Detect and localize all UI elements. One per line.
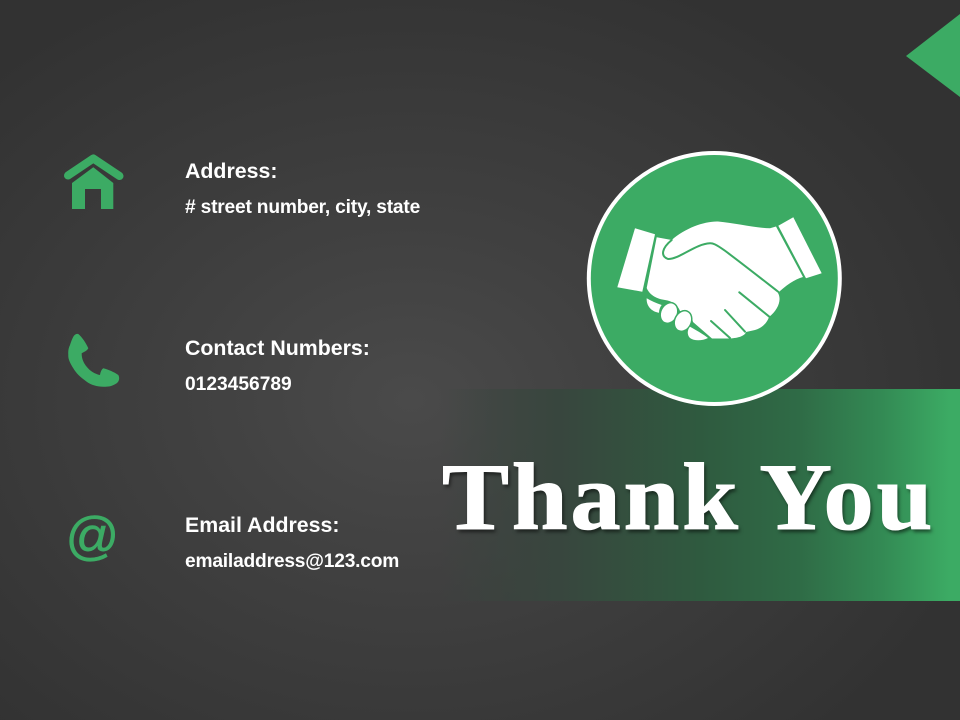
contact: email [185,513,399,572]
icon: house [64,154,124,209]
icon: at sign: @ [66,507,119,566]
numbers text: 0123456789 [185,374,292,395]
contact: address [185,159,420,218]
corner triangle [906,14,960,97]
address heading: Address: [185,159,277,183]
green gradient banner [440,389,960,601]
numbers heading: Contact Numbers: [185,336,370,360]
contact: numbers [185,336,370,395]
email text: emailaddress@123.com [185,551,399,572]
email heading: Email Address: [185,513,339,537]
badge: handshake [586,151,842,406]
address text: # street number, city, state [185,197,420,218]
icon: phone [68,334,120,387]
title: Thank You: Thank You [442,446,935,550]
icon: handshake [617,217,822,340]
